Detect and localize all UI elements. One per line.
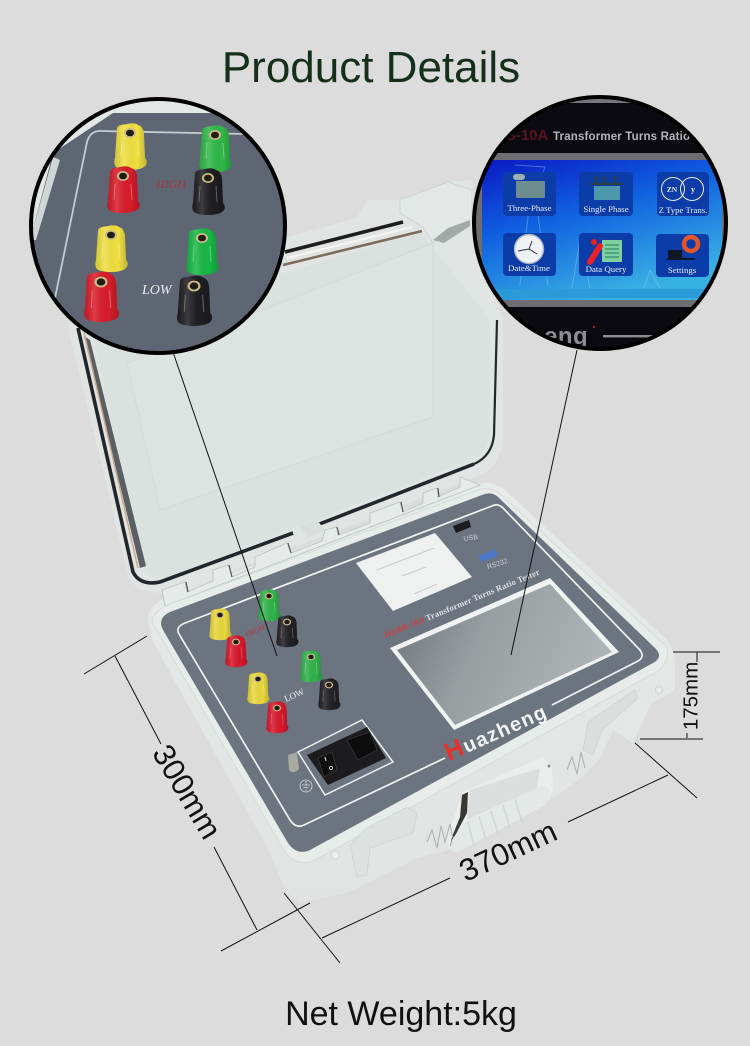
tile label: Data Query bbox=[586, 264, 627, 274]
control panel plate bbox=[161, 493, 659, 852]
brand fragment: eng bbox=[544, 323, 588, 350]
title: Product Details bbox=[222, 43, 520, 92]
brand: Huazheng bbox=[440, 697, 550, 766]
transformer icon bbox=[590, 176, 623, 200]
panel white outline bbox=[178, 505, 642, 826]
device title: Transformer Turns Ratio bbox=[553, 131, 690, 143]
handle grip bbox=[451, 786, 550, 852]
magnifier background bbox=[474, 97, 726, 349]
grip side ridges right bbox=[567, 752, 585, 774]
handle opening bbox=[467, 768, 540, 820]
LOW label: LOW bbox=[141, 283, 173, 298]
ZN label: ZN bbox=[667, 185, 678, 194]
terminal black high bbox=[276, 615, 298, 647]
rear hinge gap bbox=[433, 220, 470, 243]
dimension: 300mm bbox=[84, 636, 310, 951]
tile label: Date&Time bbox=[508, 263, 550, 273]
net weight caption: Net Weight:5kg bbox=[285, 995, 517, 1033]
usb label: USB bbox=[463, 534, 479, 543]
dimension: 175mm bbox=[640, 652, 720, 739]
model heading: HZBB-10A Transformer Turns Ratio Tester bbox=[383, 567, 541, 640]
brand dot bbox=[593, 326, 595, 328]
grip ribs bbox=[468, 799, 522, 846]
device model fragment: B-10A bbox=[505, 127, 549, 144]
printer cover lines bbox=[377, 548, 437, 594]
lid inner face bbox=[92, 232, 490, 578]
tile label: Settings bbox=[668, 265, 697, 275]
terminal green 1 bbox=[199, 125, 232, 172]
right corner wedge bbox=[613, 698, 650, 743]
hinge pin marks bbox=[186, 488, 439, 592]
front left latch bbox=[350, 807, 417, 877]
power inlet bbox=[347, 732, 377, 760]
tile: date and time bbox=[503, 233, 556, 276]
case screw right bbox=[656, 686, 662, 694]
lid gasket left and bottom bbox=[78, 328, 474, 583]
terminal green high bbox=[258, 589, 280, 621]
lid gasket right bbox=[474, 320, 497, 464]
case rim bbox=[152, 489, 668, 863]
power socket outline bbox=[298, 720, 393, 795]
terminal black low bbox=[318, 678, 340, 710]
display frame bbox=[390, 578, 619, 730]
centre latch bbox=[299, 520, 325, 538]
rs232 socket bbox=[478, 549, 498, 562]
tile: data query bbox=[579, 233, 633, 276]
screen bezel bbox=[470, 153, 730, 307]
horizon band bbox=[496, 289, 705, 298]
panel edge strips bbox=[33, 101, 212, 228]
power switch bbox=[318, 752, 337, 777]
tile label: Three-Phase bbox=[508, 203, 552, 213]
front right latch bbox=[583, 690, 638, 755]
printer cover bbox=[356, 533, 472, 611]
top bezel sliver bbox=[569, 99, 631, 103]
terminal red 2 bbox=[84, 272, 119, 322]
y label: y bbox=[691, 185, 695, 194]
open case lid bbox=[69, 180, 503, 595]
300mm label: 300mm bbox=[145, 738, 229, 845]
case base bbox=[148, 477, 675, 903]
USB port bbox=[453, 520, 479, 543]
grip side ridges left bbox=[427, 824, 453, 848]
ZN y circles icon bbox=[662, 178, 704, 200]
370mm label: 370mm bbox=[454, 813, 562, 889]
rear hinge bbox=[400, 182, 472, 243]
power socket bbox=[307, 727, 386, 785]
hinge teeth strip bbox=[162, 477, 480, 606]
HIGH label: HIGH bbox=[155, 177, 187, 191]
earth screw bbox=[288, 752, 299, 772]
case screw left bbox=[331, 851, 339, 859]
usb socket bbox=[453, 520, 471, 533]
panel: touch screen magnifier bbox=[470, 97, 730, 350]
case body bbox=[148, 483, 675, 903]
magnifier background bbox=[31, 99, 285, 353]
handle rivet bbox=[548, 764, 550, 768]
LOW label: LOW bbox=[283, 686, 306, 704]
terminal red 1 bbox=[107, 166, 140, 213]
lid left seal band bbox=[84, 336, 146, 568]
HIGH label: HIGH bbox=[244, 622, 266, 639]
terminal yellow low bbox=[247, 672, 269, 704]
dimension ticks and lines bbox=[640, 652, 720, 739]
transformer icon bbox=[513, 174, 545, 198]
data query icon bbox=[590, 239, 622, 262]
panel left light strip bbox=[30, 157, 60, 240]
lid top seal stripes bbox=[283, 222, 422, 265]
terminal yellow 1 bbox=[114, 123, 147, 170]
dimension: 370mm bbox=[284, 743, 697, 963]
lid shell bbox=[69, 180, 503, 595]
clock icon bbox=[514, 234, 544, 264]
display screen bbox=[397, 584, 612, 725]
pylon graphic bbox=[515, 165, 660, 288]
terminal green 2 bbox=[186, 228, 219, 275]
tile: three-phase bbox=[503, 172, 556, 216]
terminal yellow high bbox=[209, 608, 231, 640]
terminal red low bbox=[266, 701, 288, 733]
leader line left bbox=[173, 352, 277, 656]
settings icon bbox=[666, 237, 698, 260]
magnifier ring bbox=[31, 99, 285, 353]
RS232 port bbox=[478, 549, 509, 571]
terminal green low bbox=[300, 650, 322, 682]
terminal black 2 bbox=[177, 276, 212, 326]
handle gap bbox=[450, 792, 468, 847]
dimension ticks and lines bbox=[84, 636, 310, 951]
dimension ticks and lines bbox=[284, 743, 697, 963]
tile: settings bbox=[656, 234, 709, 277]
175mm label: 175mm bbox=[679, 662, 702, 730]
tile label: Z Type Trans. bbox=[659, 205, 707, 215]
tile label: Single Phase bbox=[583, 204, 629, 214]
rs232 label: RS232 bbox=[486, 558, 509, 571]
printer bbox=[356, 533, 472, 611]
terminal yellow 2 bbox=[95, 225, 128, 272]
small terminals bbox=[209, 589, 340, 733]
blue screen bbox=[482, 160, 722, 300]
brand underline bbox=[603, 335, 663, 337]
tile: z type bbox=[657, 172, 709, 216]
earth symbol bbox=[300, 780, 312, 792]
lid seal highlight bbox=[84, 332, 138, 568]
magnifier ring bbox=[474, 97, 726, 349]
tile: single phase bbox=[579, 172, 633, 216]
panel: terminals magnifier bbox=[20, 90, 300, 353]
terminal black 1 bbox=[192, 168, 225, 215]
panel white line bbox=[55, 131, 245, 298]
lid inner moulding outline bbox=[127, 243, 433, 510]
handle bracket bbox=[447, 757, 553, 850]
terminal red high bbox=[225, 635, 247, 667]
handle bbox=[427, 752, 585, 852]
leader line right bbox=[511, 350, 577, 655]
